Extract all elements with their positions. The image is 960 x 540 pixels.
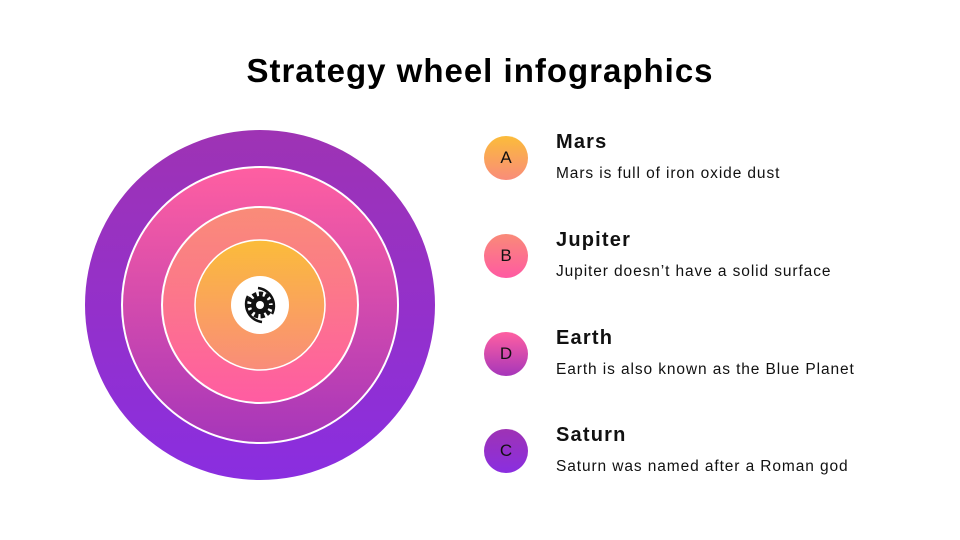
badges (484, 136, 528, 180)
item: Saturn: Saturn (556, 424, 627, 446)
item: Mars: Mars is full of iron oxide dust (556, 165, 780, 182)
item: Jupiter: Jupiter doesn’t have a solid surface (556, 263, 831, 280)
icon: gear (231, 276, 289, 334)
item: Mars (500, 131, 780, 182)
item: Earth: Earth is also known as the Blue Planet (556, 361, 855, 378)
ring: inner (195, 240, 325, 370)
item: Saturn (500, 424, 849, 475)
item: Mars: Mars (556, 131, 608, 153)
item: Saturn: C (500, 441, 512, 460)
item: Earth (500, 327, 855, 378)
item: Saturn: Saturn was named after a Roman god (556, 458, 849, 475)
item: Jupiter: Jupiter (556, 229, 631, 251)
item: Earth: D (500, 344, 512, 363)
ring: second (122, 167, 398, 443)
item: Jupiter (500, 229, 831, 280)
title: Strategy wheel infographics (246, 52, 714, 89)
item: Jupiter: B (500, 246, 512, 265)
ring: third (162, 207, 358, 403)
item: Earth: Earth (556, 327, 613, 349)
ring: outer (85, 130, 435, 480)
item: Mars: A (500, 148, 512, 167)
